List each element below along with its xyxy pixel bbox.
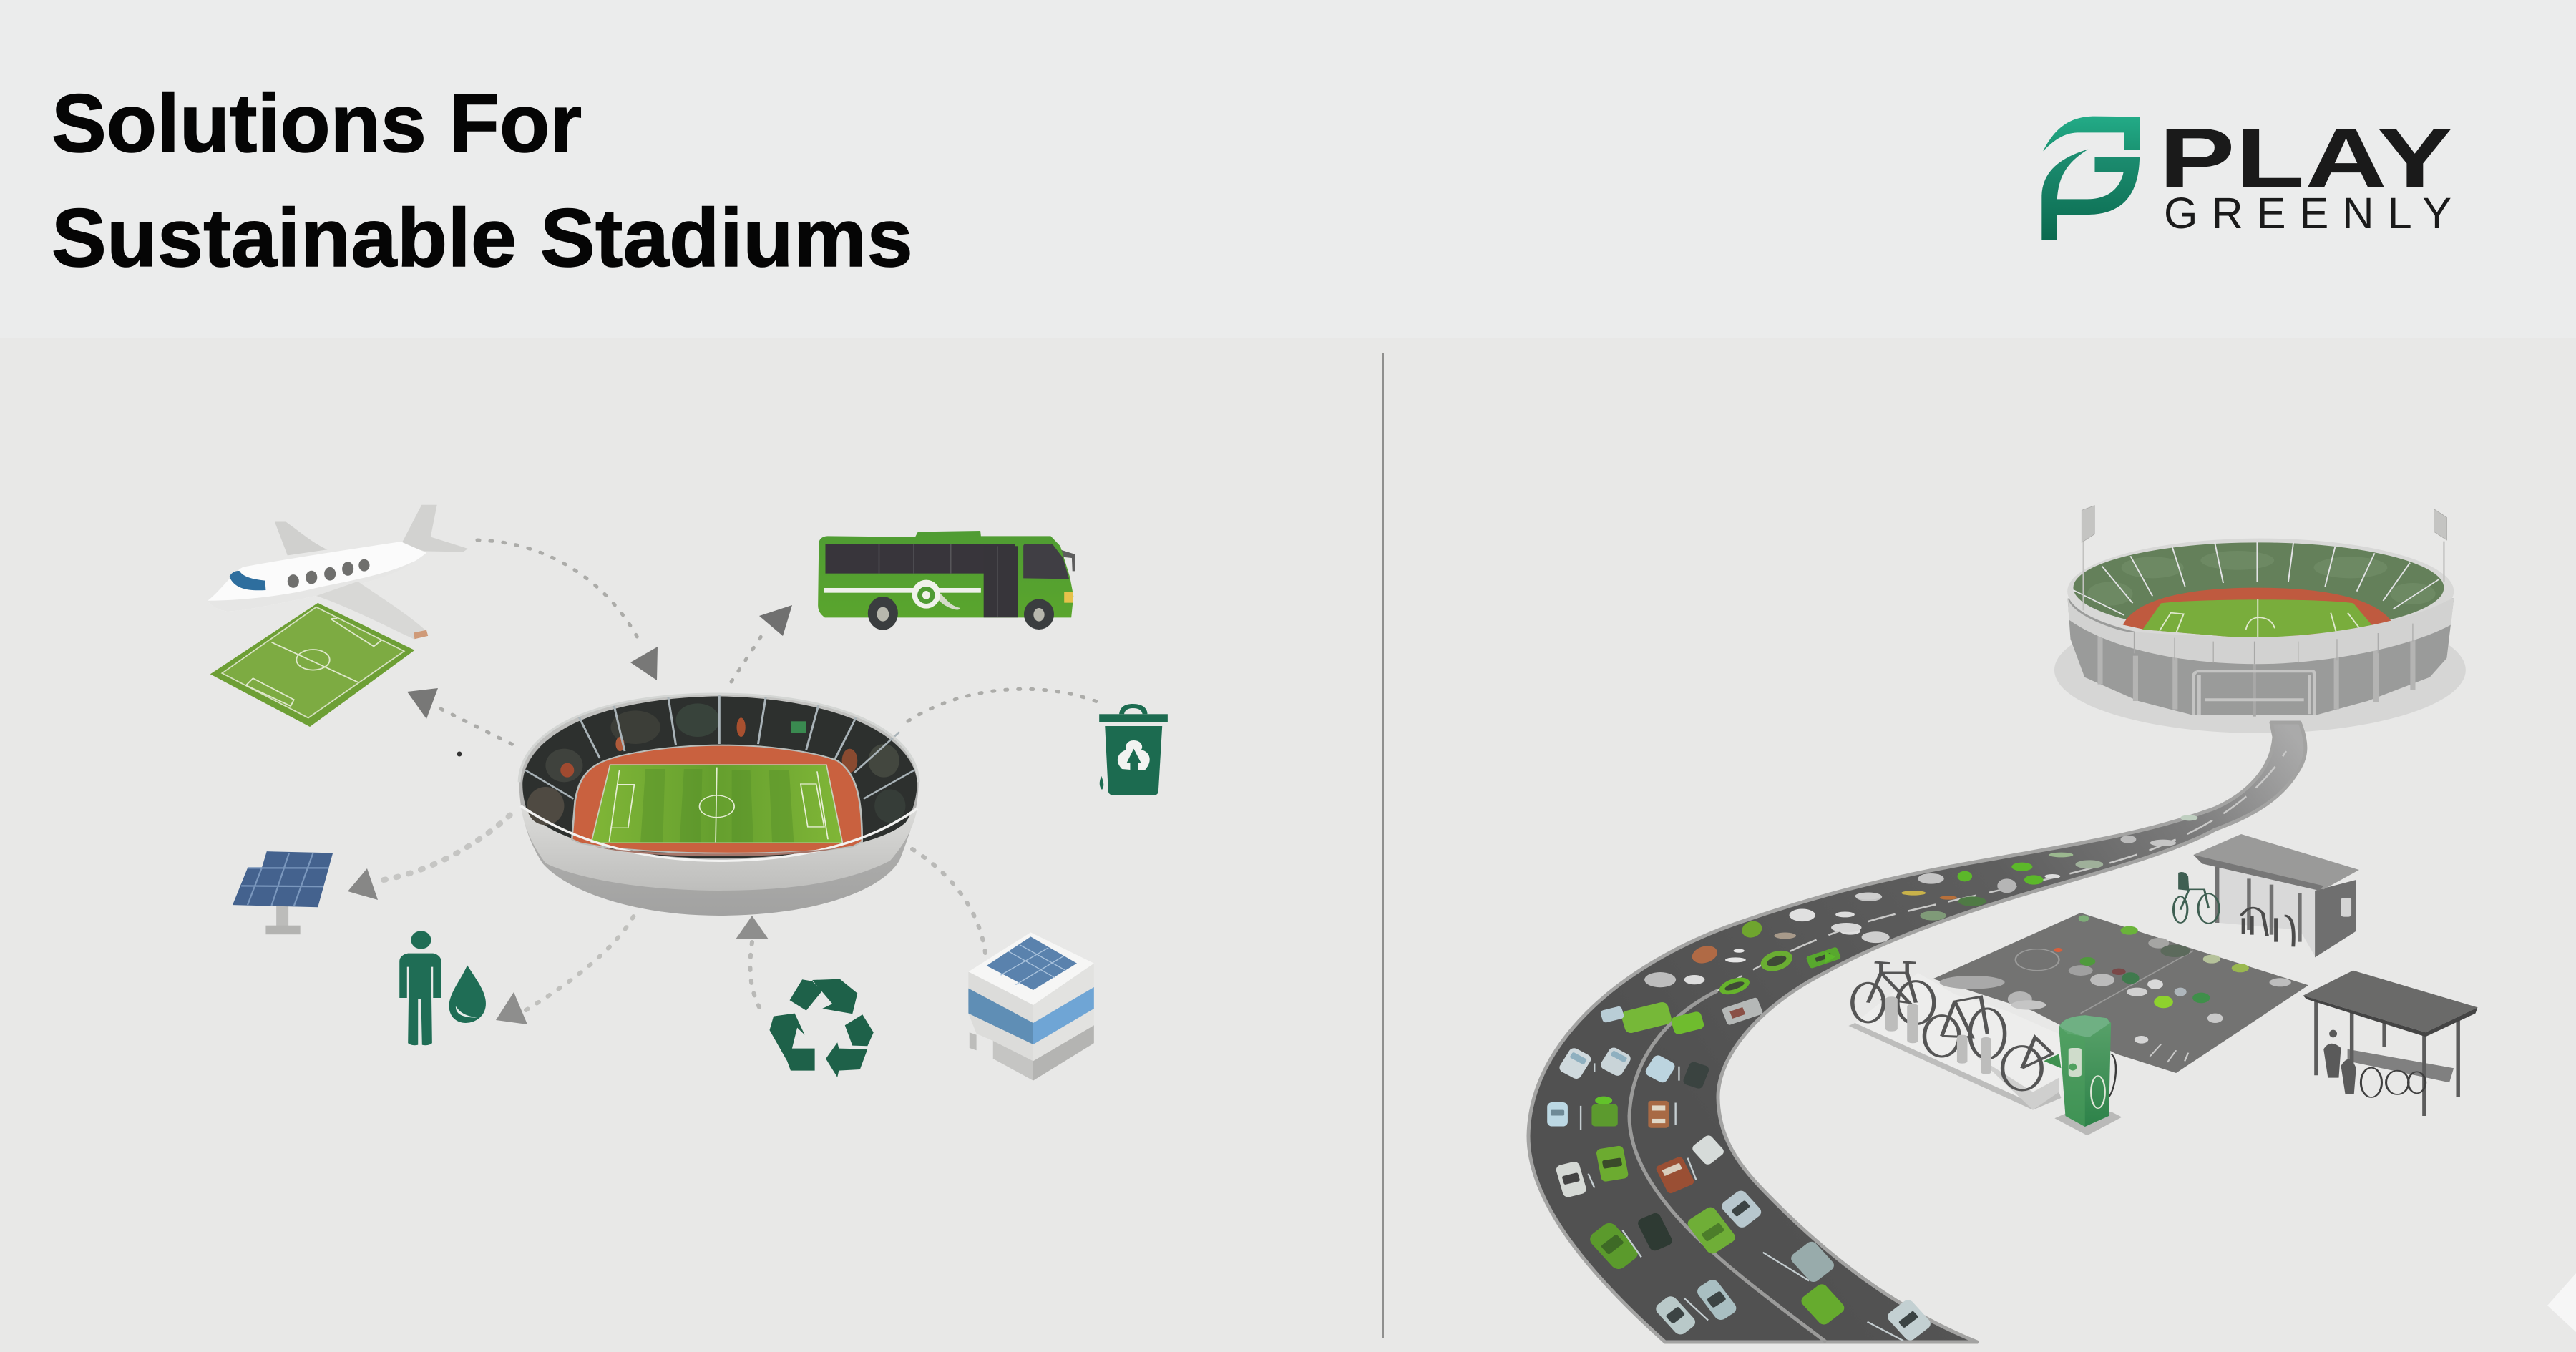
bicycle parking rack xyxy=(1848,962,2061,1110)
left central stadium xyxy=(519,694,919,916)
stadium pitch lines xyxy=(609,768,828,842)
covered bike shelter xyxy=(2303,971,2477,1116)
icon: green bus xyxy=(818,531,1075,630)
right stadium pitch xyxy=(2142,599,2375,639)
bikes xyxy=(1853,962,2052,1090)
cyclist xyxy=(2173,889,2219,924)
corner highlight xyxy=(2547,1273,2576,1332)
floodlight left xyxy=(2082,506,2094,610)
stadium front rim highlight xyxy=(521,806,917,861)
stadium running track xyxy=(572,745,862,853)
icon: person and water drop xyxy=(399,931,486,1045)
stadium dark stands xyxy=(522,696,917,858)
dotted connectors and arrows xyxy=(348,540,1104,1024)
road lane markings xyxy=(1717,751,2286,991)
icon: airplane xyxy=(208,505,468,611)
icon: recycling bin xyxy=(1099,704,1168,795)
stadium pitch stripes xyxy=(640,769,794,842)
stadium outer wall xyxy=(519,694,919,916)
panel divider xyxy=(1382,353,1384,1338)
logo icon xyxy=(2041,117,2140,240)
EV charging station xyxy=(2044,1015,2122,1135)
stadium green stands xyxy=(2073,542,2444,633)
icon: recycling arrows xyxy=(769,979,874,1077)
title: Sustainable Stadiums xyxy=(52,192,913,284)
people waiting xyxy=(2241,908,2293,946)
stadium ground shadow xyxy=(2054,607,2466,733)
logo: Play Greenly xyxy=(2041,111,2453,240)
parking lot xyxy=(1933,913,2308,1073)
stands beams xyxy=(2073,542,2439,615)
icon: solar panel xyxy=(233,851,333,934)
logo wordmark PLAY: PLAY xyxy=(2159,111,2453,206)
stadium pitch xyxy=(591,765,842,843)
icon: football pitch xyxy=(210,603,414,727)
stands texture xyxy=(2087,551,2436,606)
stadium top rim xyxy=(519,694,919,782)
parked vehicles xyxy=(1940,915,2291,1044)
panel: left stadium hub and solutions xyxy=(208,505,1168,1081)
winding road xyxy=(1528,722,2306,1342)
seated people xyxy=(2323,1030,2356,1094)
traffic on the lower road xyxy=(1547,893,1933,1343)
stadium lower wall xyxy=(2068,599,2454,715)
stadium top rim xyxy=(2067,539,2454,645)
logo wordmark GREENLY: GREENLY xyxy=(2164,189,2451,237)
right stadium track xyxy=(2123,588,2393,639)
icon: building with solar roof xyxy=(968,932,1094,1081)
header band xyxy=(0,0,2576,338)
stadium crowd patches xyxy=(527,703,905,825)
panel: right stadium access and transport xyxy=(1528,506,2477,1343)
traffic on the upper road xyxy=(1825,815,2197,964)
road centre divider xyxy=(1629,991,1826,1342)
stadium entrance frame xyxy=(2193,671,2314,715)
rack stands xyxy=(1885,996,1991,1074)
stadium roof beams xyxy=(525,694,917,799)
stadium facade band xyxy=(2068,596,2454,664)
title: Solutions For xyxy=(52,78,582,170)
stadium wall light band xyxy=(521,806,917,891)
floodlight right xyxy=(2434,509,2446,582)
right stadium xyxy=(2054,506,2466,733)
bus shelter with cyclist xyxy=(2173,834,2359,957)
airplane lower wing over pitch xyxy=(316,582,428,639)
